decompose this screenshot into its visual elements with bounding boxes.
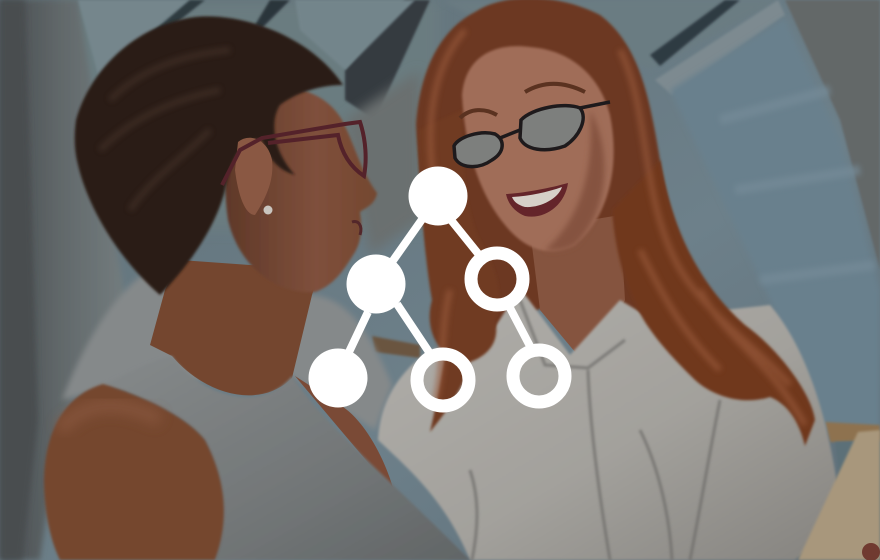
left woman: grey sleeveless top: [103, 356, 470, 560]
left woman: glasses: [222, 122, 366, 185]
background person in white shirt: [62, 262, 392, 430]
right woman: hair highlights: [430, 30, 805, 425]
left woman: mouth: [352, 222, 361, 235]
icon lower-middle ring node: [417, 354, 469, 406]
right woman: mouth: [506, 183, 568, 217]
right woman: face: [462, 46, 614, 251]
right woman: left curls over shoulder: [418, 110, 500, 432]
icon lower-right ring node: [513, 350, 565, 402]
right woman: hair back: [416, 0, 720, 350]
left woman: earring: [264, 206, 272, 214]
right woman: shirt folds: [470, 300, 720, 560]
icon top solid node: [408, 166, 468, 226]
icon: white network tree: [308, 166, 565, 408]
icon left solid node: [346, 254, 406, 314]
right woman: white shirt: [378, 288, 838, 560]
left woman: chest and strap: [295, 376, 393, 488]
left woman: face: [225, 86, 377, 292]
left woman: ear: [235, 138, 272, 215]
right woman: neck: [530, 215, 625, 370]
icon right ring node: [471, 253, 523, 305]
woman on the right: [378, 0, 838, 560]
woman on the left: [44, 16, 470, 560]
fingertip on tablet: [862, 543, 880, 560]
tablet at lower right: [798, 430, 880, 560]
icon lower-left solid node: [308, 348, 368, 408]
right woman: long curls over shoulder: [612, 160, 815, 446]
left woman: upper arm: [44, 384, 224, 560]
icon connector lines: [349, 218, 531, 352]
left woman: neck and shoulder: [150, 260, 320, 395]
right woman: glasses: [454, 102, 610, 167]
left woman: arm shading: [60, 406, 160, 430]
left woman: hair highlights: [100, 50, 230, 210]
left woman: short dark hair: [75, 16, 343, 295]
right woman: eyebrows: [460, 84, 585, 118]
right woman: cheek shadow: [545, 110, 604, 251]
